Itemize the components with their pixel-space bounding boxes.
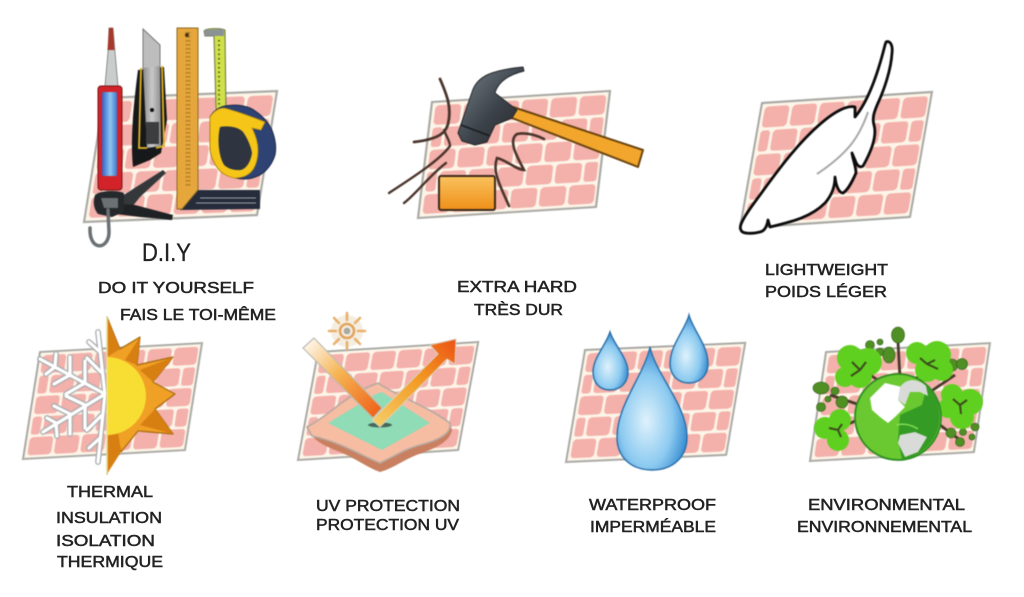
icon: globe: [855, 374, 941, 460]
icon: square ruler: [177, 28, 260, 210]
brick wall: lightweight: [740, 92, 932, 228]
icon: feather: [740, 42, 892, 233]
label: isolation: ISOLATION: [56, 533, 155, 550]
label: très dur: TRÈS DUR: [474, 302, 563, 319]
icon: tape measure: [204, 29, 276, 179]
icon: reflected UV ray: [303, 338, 456, 427]
icon: sun half: [107, 317, 175, 474]
label: thermique: THERMIQUE: [57, 554, 163, 571]
label: environmental: ENVIRONMENTAL: [808, 497, 965, 514]
icon: brick fragment: [439, 176, 495, 210]
label: environnemental: ENVIRONNEMENTAL: [797, 519, 972, 536]
label: do it yourself: DO IT YOURSELF: [98, 280, 254, 297]
heading: D.I.Y: D.I.Y: [142, 239, 191, 267]
icon: small sun: [329, 313, 365, 349]
brick wall: environmental: [810, 343, 990, 461]
label: poids léger: POIDS LÉGER: [765, 284, 887, 301]
icon: hammer: [458, 67, 643, 167]
brick wall: D.I.Y: [84, 91, 277, 222]
label: extra hard: EXTRA HARD: [457, 279, 577, 296]
brick wall: thermal: [23, 343, 202, 459]
icon: shielding pad: [307, 383, 452, 472]
label: waterproof: WATERPROOF: [589, 497, 716, 514]
label: fais le toi-même: FAIS LE TOI-MÊME: [120, 307, 276, 324]
icon: tree branches and leaves: [813, 327, 983, 451]
brick wall: waterproof: [566, 343, 745, 462]
icon: utility knife: [132, 29, 167, 167]
label: imperméable: IMPERMÉABLE: [590, 519, 716, 536]
icon: snowflake half: [40, 332, 105, 462]
brick wall: extra hard: [418, 91, 610, 218]
label: UV protection: UV PROTECTION: [316, 498, 460, 515]
panel: environmental: [797, 327, 990, 536]
panel: extra hard: [389, 67, 643, 319]
label: insulation: INSULATION: [56, 510, 162, 527]
panel: D.I.Y: [84, 28, 277, 324]
label: thermal: THERMAL: [67, 484, 153, 501]
label: lightweight: LIGHTWEIGHT: [765, 262, 889, 279]
icon: caulking gun: [90, 28, 173, 246]
label: protection UV: PROTECTION UV: [316, 517, 460, 534]
panel: waterproof: [566, 315, 745, 536]
brick wall: UV: [298, 342, 478, 460]
panel: lightweight: [740, 42, 932, 301]
panel: UV protection: [298, 313, 478, 534]
panel: thermal insulation: [23, 317, 202, 571]
icon: water drops: [593, 315, 708, 470]
icon: cracks: [389, 79, 544, 206]
